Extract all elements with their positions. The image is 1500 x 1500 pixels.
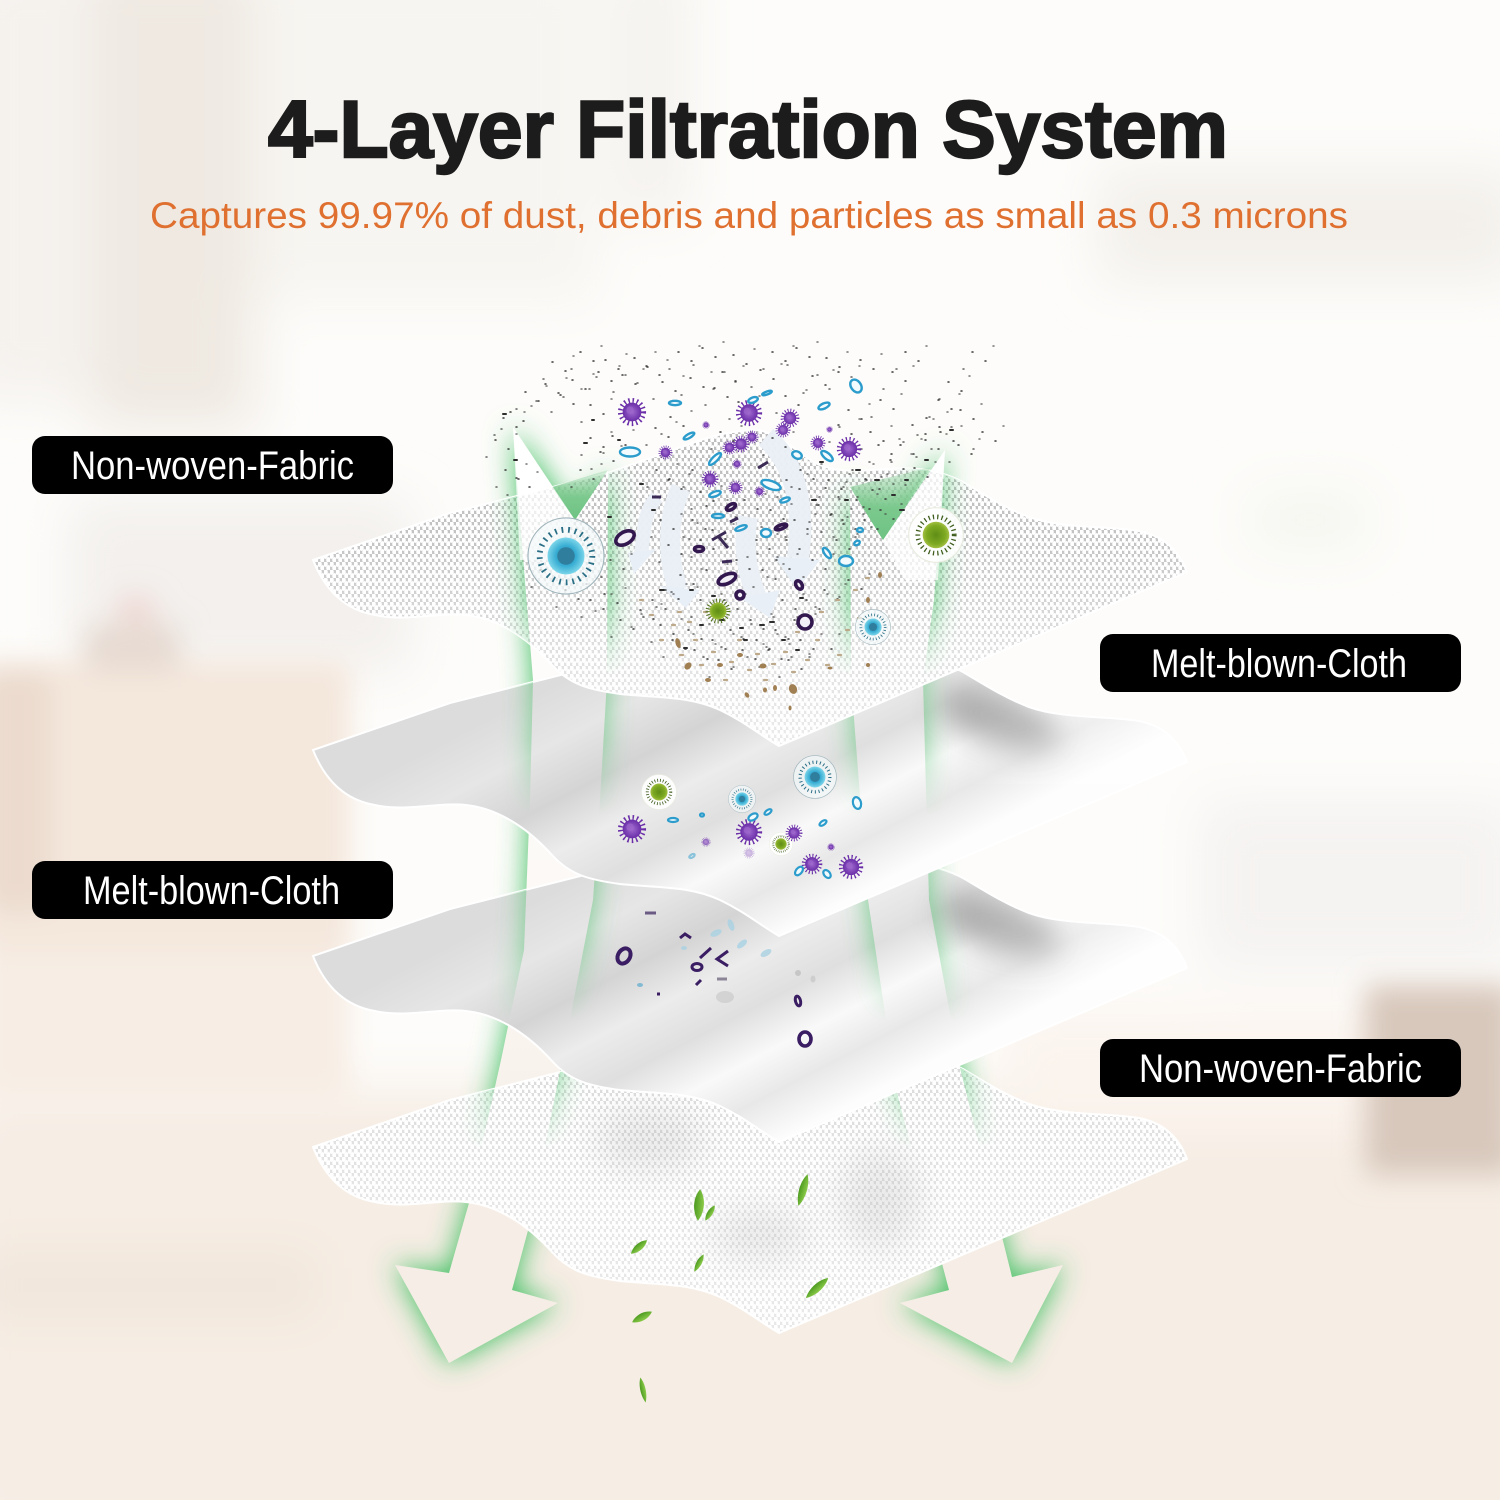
fine dark specks xyxy=(486,342,1004,677)
airflow arrows behind the layers xyxy=(395,427,1063,1363)
small blue virus cell xyxy=(855,609,891,645)
small green virus xyxy=(708,601,728,621)
layer 3: melt-blown cloth sheet xyxy=(312,868,1130,1143)
virus cells on layer 2 xyxy=(641,756,836,856)
blue rings on layer 2 xyxy=(668,796,862,879)
particles caught on layer 2 xyxy=(622,756,862,879)
label: non-woven fabric, bottom right: Non-woven-Fabric xyxy=(1139,1047,1422,1091)
blue rings on layer 1 xyxy=(620,377,864,566)
swirling white air arrows xyxy=(628,437,820,618)
title: 4-Layer Filtration System xyxy=(268,85,1228,175)
particles caught on layer 3 xyxy=(615,913,816,1046)
small rod bacteria on layer 1 xyxy=(652,462,768,562)
dark purple rings on layer 1 xyxy=(613,502,812,629)
large blue virus cell xyxy=(528,518,604,594)
label: melt-blown cloth, right: Melt-blown-Cloth xyxy=(1151,642,1407,686)
purple microbes on layer 2 xyxy=(622,819,860,876)
purple microbes on layer 1 xyxy=(622,402,858,495)
sandy specks xyxy=(640,578,869,680)
arrowhead notches on top of layer 1 xyxy=(513,427,945,580)
dust cloud above and on layer 1 xyxy=(486,342,1004,710)
layer 2: melt-blown cloth sheet xyxy=(312,670,1130,937)
label: melt-blown cloth, left xyxy=(32,861,393,919)
heavier dust flecks xyxy=(503,414,953,650)
clean-air leaves xyxy=(629,1173,831,1403)
label: melt-blown cloth, left: Melt-blown-Cloth xyxy=(83,869,340,913)
layer 1: non-woven fabric sheet xyxy=(312,431,1185,747)
label: melt-blown cloth, right xyxy=(1100,634,1461,692)
subtitle: Captures 99.97% of dust, debris and particles as small as 0.3 microns xyxy=(150,195,1348,236)
layer 4: non-woven fabric sheet xyxy=(312,1066,1188,1334)
label: non-woven fabric, top left xyxy=(32,436,393,494)
label: non-woven fabric, top left: Non-woven-Fabric xyxy=(71,444,354,488)
label: non-woven fabric, bottom right xyxy=(1100,1039,1461,1097)
large green virus cell xyxy=(909,508,963,562)
brown debris xyxy=(674,572,882,710)
